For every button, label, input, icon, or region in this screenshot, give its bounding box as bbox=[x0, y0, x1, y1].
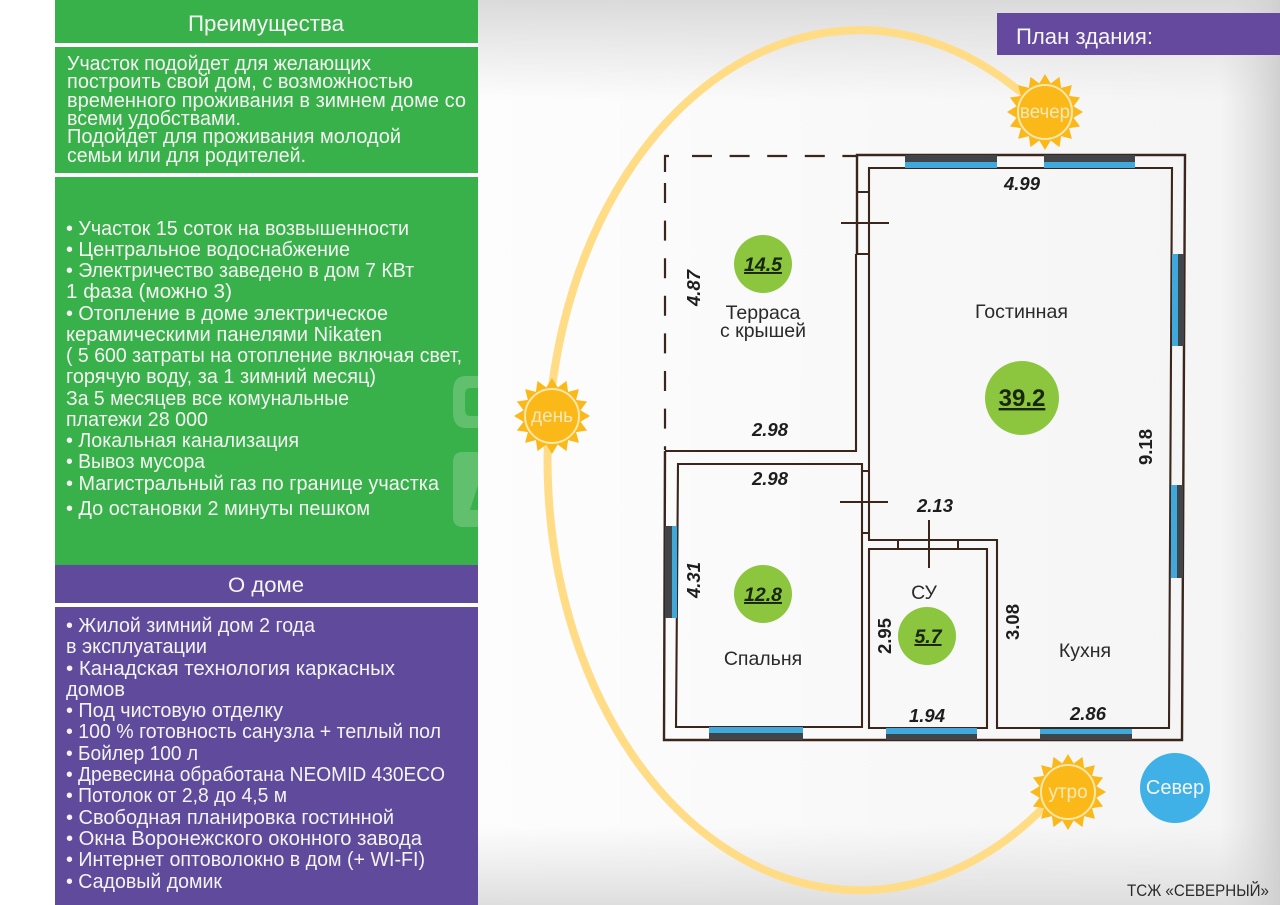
text block: house features list: • Потолок от 2,8 до 4,5 м bbox=[66, 785, 287, 807]
text block: plot features list: • Центральное водоснабжение bbox=[66, 239, 350, 261]
dimensions: 3.08 bbox=[1002, 604, 1023, 640]
room: terrace: 14.5 bbox=[744, 254, 783, 276]
room: bathroom bbox=[898, 582, 956, 665]
text block: house features list bbox=[55, 607, 478, 905]
text block: plot features list: горячую воду, за 1 зимний месяц) bbox=[66, 366, 376, 388]
dimensions: 2.13 bbox=[916, 495, 954, 516]
icon: north marker bbox=[1140, 753, 1210, 823]
text block: house features list: • Канадская технология каркасных bbox=[66, 658, 395, 680]
text block: house features list: • Свободная планировка гостинной bbox=[66, 807, 394, 829]
bedroom walls bbox=[676, 464, 862, 728]
text block: plot summary: Подойдет для проживания молодой bbox=[67, 126, 401, 148]
icon: day sun: день bbox=[531, 406, 573, 427]
heading: about the house bbox=[55, 565, 478, 603]
text block: house features list: • Интернет оптоволокно в дом (+ WI-FI) bbox=[66, 849, 425, 871]
window: top left bbox=[905, 155, 997, 168]
room: kitchen label: Кухня bbox=[1059, 640, 1111, 662]
icon: north marker: Север bbox=[1146, 777, 1204, 799]
room: living room bbox=[975, 301, 1068, 435]
text block: plot features list: 1 фаза (можно 3) bbox=[66, 281, 232, 303]
dimensions: 4.31 bbox=[683, 562, 704, 599]
text block: plot features list: • Отопление в доме электрическое bbox=[66, 303, 388, 325]
text block: house features list: домов bbox=[66, 679, 125, 701]
text block: plot summary: всеми удобствами. bbox=[67, 108, 241, 130]
icon: morning sun bbox=[1030, 754, 1106, 830]
text block: house features list: • Садовый домик bbox=[66, 871, 222, 893]
floor plan bbox=[664, 155, 1185, 740]
window: bedroom bottom bbox=[709, 727, 803, 740]
dimensions: 2.98 bbox=[751, 468, 789, 489]
text block: house features list: • Бойлер 100 л bbox=[66, 743, 198, 765]
text block: plot features list: За 5 месяцев все комунальные bbox=[66, 388, 349, 410]
icon: day sun bbox=[514, 378, 590, 454]
text block: plot summary: семьи или для родителей. bbox=[67, 145, 306, 167]
text block: house features list: • Древесина обработана NEOMID 430ECO bbox=[66, 764, 445, 786]
room: living room: Гостинная bbox=[975, 301, 1068, 323]
text block: plot summary: Участок подойдет для желающих bbox=[67, 53, 371, 75]
house outer wall bbox=[664, 155, 1185, 740]
heading: building plan banner: План здания: bbox=[1016, 24, 1153, 49]
terrace right and bottom wall bbox=[665, 254, 856, 451]
room: terrace: Терраса bbox=[726, 302, 801, 324]
dimensions: 4.99 bbox=[1003, 173, 1041, 194]
text block: plot features list: керамическими панелями Nikaten bbox=[66, 324, 382, 346]
text block: plot features list: платежи 28 000 bbox=[66, 409, 208, 431]
sun path arc bbox=[548, 30, 1068, 890]
room: terrace bbox=[720, 235, 806, 342]
dimensions: 9.18 bbox=[1135, 429, 1156, 465]
text block: house features list: в эксплуатации bbox=[66, 636, 207, 658]
terrace dashed outline bbox=[665, 156, 857, 450]
text block: house features list: • 100 % готовность санузла + теплый пол bbox=[66, 721, 441, 743]
window: bathroom bottom bbox=[886, 728, 977, 740]
window: bedroom left bbox=[665, 526, 677, 618]
text block: plot features list: • Магистральный газ по границе участка bbox=[66, 473, 440, 495]
text block: plot features list: • Вывоз мусора bbox=[66, 451, 206, 473]
window: top right bbox=[1044, 155, 1135, 168]
text block: house features list: • Жилой зимний дом 2 года bbox=[66, 615, 316, 637]
icon: evening sun bbox=[1007, 74, 1083, 150]
window: right lower bbox=[1171, 485, 1183, 578]
room: bathroom: СУ bbox=[911, 582, 938, 604]
text block: plot summary: временного проживания в зимнем доме со bbox=[67, 90, 466, 112]
dimensions: 2.86 bbox=[1069, 703, 1107, 724]
text block: house features list: • Окна Воронежского оконного завода bbox=[66, 828, 423, 850]
dimensions: 2.98 bbox=[751, 419, 789, 440]
heading: advantages bbox=[55, 0, 478, 43]
bedroom door bbox=[840, 471, 888, 533]
room: bathroom: 5.7 bbox=[914, 626, 943, 648]
panel: about the house bbox=[55, 565, 478, 905]
room: bedroom: Спальня bbox=[724, 648, 802, 670]
terrace door bbox=[841, 192, 889, 254]
text block: plot features list bbox=[55, 177, 478, 565]
text block: plot features list: ( 5 600 затраты на отопление включая свет, bbox=[66, 345, 462, 367]
heading: building plan banner bbox=[997, 13, 1280, 55]
room: bedroom bbox=[724, 565, 802, 670]
icon: morning sun: утро bbox=[1048, 782, 1088, 803]
text block: plot features list: • Локальная канализация bbox=[66, 430, 299, 452]
text block: plot summary bbox=[55, 47, 478, 173]
text block: house features list: • Под чистовую отделку bbox=[66, 700, 283, 722]
dimensions: 1.94 bbox=[909, 705, 945, 726]
living room inner wall bbox=[868, 168, 1172, 728]
window: kitchen bottom bbox=[1040, 729, 1132, 740]
bathroom door bbox=[898, 520, 958, 568]
window: right upper bbox=[1172, 254, 1184, 346]
heading: about the house: О доме bbox=[228, 574, 304, 597]
heading: advantages: Преимущества bbox=[188, 11, 345, 36]
panel: advantages bbox=[55, 0, 478, 565]
icon: evening sun: вечер bbox=[1020, 102, 1070, 123]
text block: plot features list: • До остановки 2 минуты пешком bbox=[66, 498, 370, 520]
dimensions: 4.87 bbox=[683, 268, 704, 307]
text block: plot features list: • Участок 15 соток на возвышенности bbox=[66, 218, 409, 240]
bathroom walls bbox=[869, 549, 987, 728]
room: living room: 39.2 bbox=[999, 385, 1045, 412]
dimensions: 2.95 bbox=[874, 618, 895, 654]
text block: plot summary: построить свой дом, с возможностью bbox=[67, 71, 413, 93]
dimensions bbox=[683, 173, 1156, 726]
room: terrace: с крышей bbox=[720, 320, 806, 342]
text block: plot features list: • Электричество заведено в дом 7 КВт bbox=[66, 260, 414, 282]
room: bedroom: 12.8 bbox=[744, 584, 782, 606]
